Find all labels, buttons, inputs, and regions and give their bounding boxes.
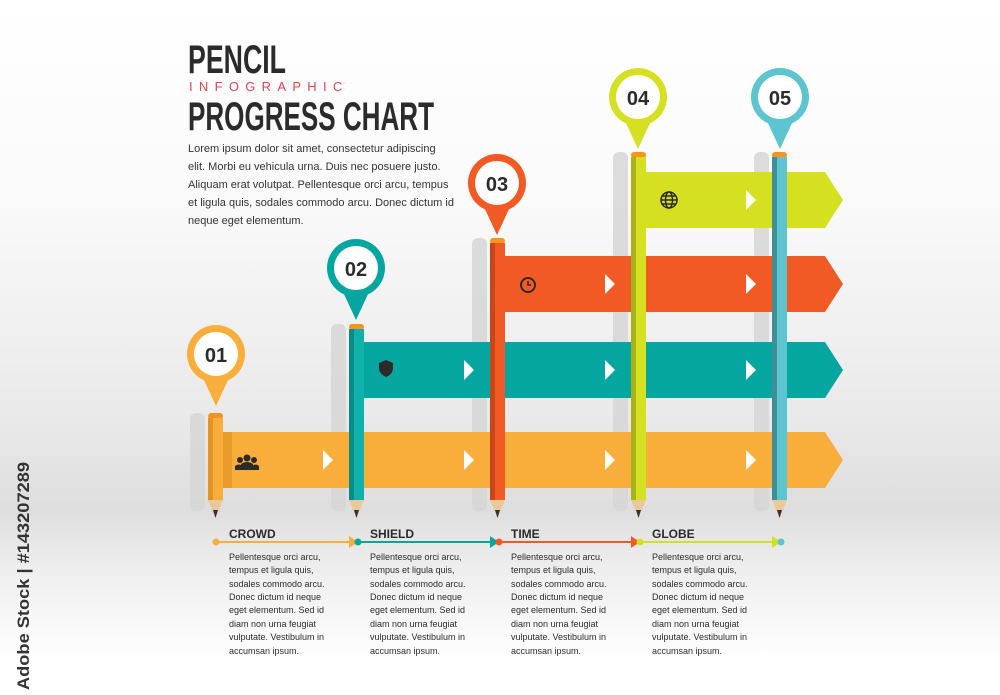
intro text: et ligula quis, sodales commodo arcu. Donec dictum id: [188, 197, 454, 209]
column: globe: vulputate. Vestibulum in: [652, 632, 747, 642]
pencil 2: [349, 324, 364, 518]
title: PROGRESS CHART: [188, 95, 434, 139]
column: crowd: Donec dictum id neque: [229, 592, 321, 602]
column: crowd: vulputate. Vestibulum in: [229, 632, 324, 642]
watermark side text: Adobe Stock | #143207289: [14, 462, 33, 690]
column: shield: SHIELD: [370, 527, 414, 541]
column: time: vulputate. Vestibulum in: [511, 632, 606, 642]
bar: shield (teal): [363, 342, 843, 398]
column: time: accumsan ipsum.: [511, 646, 581, 656]
marker 01: 01: [205, 345, 227, 367]
title: INFOGRAPHIC: [189, 79, 349, 94]
icon: clock: [521, 278, 535, 292]
column: shield: Pellentesque orci arcu,: [370, 552, 462, 562]
icon: shield: [379, 360, 393, 377]
column: shield: [370, 527, 466, 656]
marker 02: [327, 239, 385, 320]
intro text: Aliquam erat volutpat. Pellentesque orci arcu, tempus: [188, 179, 449, 191]
intro text: Lorem ipsum dolor sit amet, consectetur adipiscing: [188, 143, 436, 155]
intro text: [188, 143, 454, 227]
column: shield: vulputate. Vestibulum in: [370, 632, 465, 642]
column: shield: sodales commodo arcu.: [370, 579, 466, 589]
column: globe: [652, 527, 748, 656]
marker 04: 04: [627, 88, 650, 110]
column: globe: sodales commodo arcu.: [652, 579, 748, 589]
column: globe: tempus et ligula quis,: [652, 565, 737, 575]
column: time: [511, 527, 607, 656]
column: globe: eget elementum. Sed id: [652, 605, 747, 615]
column: crowd: accumsan ipsum.: [229, 646, 299, 656]
column: time: tempus et ligula quis,: [511, 565, 596, 575]
pencil 4: [631, 152, 646, 518]
column: time: Pellentesque orci arcu,: [511, 552, 603, 562]
column: globe: diam non urna feugiat: [652, 619, 740, 629]
title: PENCIL: [188, 38, 286, 82]
column: crowd: [229, 527, 325, 656]
bar: time (red-orange): [504, 256, 843, 312]
column: time: TIME: [511, 527, 540, 541]
column: time: Donec dictum id neque: [511, 592, 603, 602]
column: shield: diam non urna feugiat: [370, 619, 458, 629]
bar: crowd (orange): [222, 432, 843, 488]
column: crowd: tempus et ligula quis,: [229, 565, 314, 575]
column: shield: Donec dictum id neque: [370, 592, 462, 602]
column: globe: Donec dictum id neque: [652, 592, 744, 602]
column: crowd: sodales commodo arcu.: [229, 579, 325, 589]
intro text: neque eget elementum.: [188, 215, 304, 227]
column: crowd: CROWD: [229, 527, 276, 541]
bar: globe (lime): [645, 172, 843, 228]
column: crowd: diam non urna feugiat: [229, 619, 317, 629]
column: time: eget elementum. Sed id: [511, 605, 606, 615]
intro text: elit. Morbi eu vehicula urna. Duis nec posuere justo.: [188, 161, 441, 173]
column: shield: accumsan ipsum.: [370, 646, 440, 656]
pencil 1: [208, 413, 223, 518]
marker 03: [468, 154, 526, 235]
markers: [187, 68, 809, 406]
pencil 5: [772, 152, 787, 518]
marker 04: [609, 68, 667, 149]
marker 05: 05: [769, 88, 791, 110]
column: crowd: eget elementum. Sed id: [229, 605, 324, 615]
pencil shadows: [190, 152, 769, 511]
column: time: diam non urna feugiat: [511, 619, 599, 629]
pencil 3: [490, 238, 505, 518]
column: globe: GLOBE: [652, 527, 695, 541]
marker 05: [751, 68, 809, 149]
column: crowd: Pellentesque orci arcu,: [229, 552, 321, 562]
marker 02: 02: [345, 259, 367, 281]
column: globe: Pellentesque orci arcu,: [652, 552, 744, 562]
column: shield: tempus et ligula quis,: [370, 565, 455, 575]
column: globe: accumsan ipsum.: [652, 646, 722, 656]
icon: crowd: [235, 454, 259, 470]
title: [188, 38, 434, 139]
marker 03: 03: [486, 174, 508, 196]
marker 01: [187, 325, 245, 406]
column: shield: eget elementum. Sed id: [370, 605, 465, 615]
pencils: [208, 152, 787, 518]
icon: globe: [661, 192, 677, 208]
timeline arrows: [212, 536, 784, 548]
column: time: sodales commodo arcu.: [511, 579, 607, 589]
